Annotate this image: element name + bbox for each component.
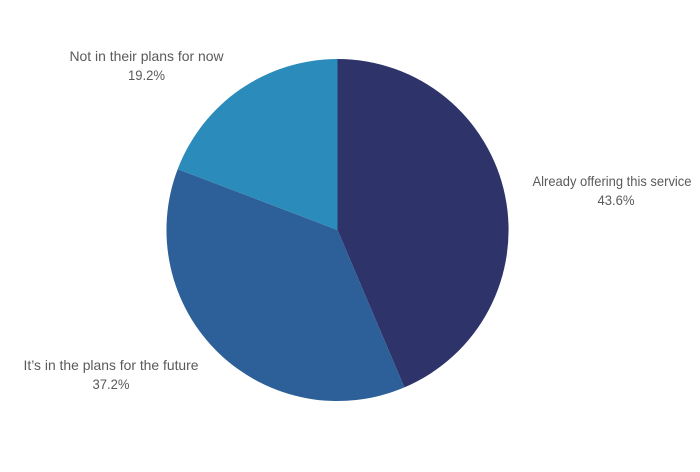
- label: not in their plans: Not in their plans for now: [70, 48, 224, 64]
- label: in the plans for the future: It’s in the plans for the future: [24, 357, 199, 373]
- label: already offering: Already offering this service: [532, 173, 692, 189]
- pie slice: already offering 43.6%: [338, 59, 509, 387]
- label: not in their plans: 19.2%: [128, 67, 165, 83]
- label: in the plans for the future: 37.2%: [92, 376, 130, 392]
- label: in the plans for the future: [24, 357, 199, 392]
- label: not in their plans: [70, 48, 224, 83]
- pie slice: in the plans 37.2%: [166, 169, 404, 401]
- label: already offering: [532, 173, 692, 208]
- pie slice: not in plans 19.2%: [178, 59, 338, 230]
- label: already offering: 43.6%: [598, 192, 634, 208]
